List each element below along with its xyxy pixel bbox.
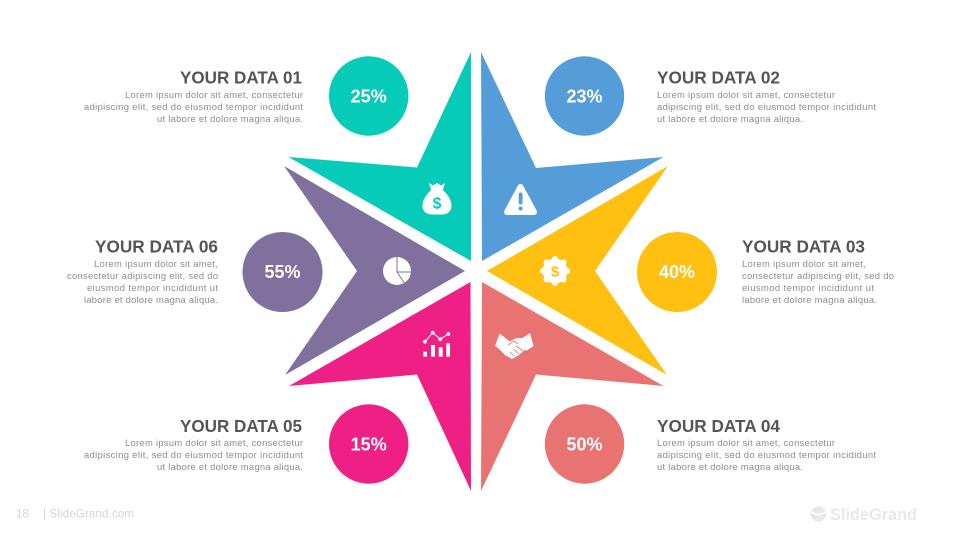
icon: money bag: $ [433,196,442,212]
icon: pie chart [383,256,412,285]
star point: purple [284,166,465,375]
panel: data 06 text: YOUR DATA 06 [95,236,218,256]
panel: data 05 text: adipiscing elit, sed do eiusmod tempor incididunt [84,449,303,460]
panel: data 02 text: Lorem ipsum dolor sit amet, consectetur [657,89,835,100]
panel: data 02 text: ut labore et dolore magna aliqua. [657,113,803,124]
icon: gear [540,256,570,286]
panel: data 01 text: YOUR DATA 01 [180,68,302,88]
panel: data 05 text: ut labore et dolore magna aliqua. [157,461,303,472]
star point: magenta [289,282,471,491]
badge: 40% [637,232,717,312]
panel: data 01 text: Lorem ipsum dolor sit amet, consectetur [125,89,303,100]
star point: yellow [487,166,668,375]
panel: data 04 text: ut labore et dolore magna aliqua. [657,461,803,472]
footer: brand logo: SlideGrand [830,505,917,524]
panel: data 03 text: eiusmod tempor incididunt ut [742,282,874,293]
panel: data 01 text: ut labore et dolore magna aliqua. [157,113,303,124]
panel: data 03 text [742,236,894,305]
badge: 50% [545,404,624,484]
star point: blue [481,52,664,261]
footer: site name: | SlideGrand.com [43,508,134,520]
icon: gear: $ [551,264,560,280]
icon: warning triangle [507,187,534,212]
badge: 25%: 25% [351,86,387,106]
panel: data 06 text: consectetur adipiscing elit, sed do [67,270,218,281]
panel: data 03 text: YOUR DATA 03 [742,236,865,256]
panel: data 01 text: adipiscing elit, sed do eiusmod tempor incididunt [84,101,303,112]
badge: 55%: 55% [264,262,301,282]
panel: data 04 text: adipiscing elit, sed do eiusmod tempor incididunt [657,449,876,460]
badge: 25% [329,56,408,136]
panel: data 03 text: consectetur adipiscing elit, sed do [742,270,894,281]
badge: 23%: 23% [566,86,603,106]
panel: data 04 text: Lorem ipsum dolor sit amet, consectetur [657,437,835,448]
panel: data 05 text [84,416,303,472]
badge: 55% [242,232,322,312]
badge: 23% [545,56,624,136]
panel: data 02 text: YOUR DATA 02 [657,68,780,88]
panel: data 06 text: eiusmod tempor incididunt ut [87,282,218,293]
panel: data 03 text: Lorem ipsum dolor sit amet, [742,258,866,269]
badge: 50%: 50% [566,434,603,454]
star point: teal [288,52,471,261]
star point: coral [481,282,664,491]
icon: line and bar chart [423,331,450,357]
badge: 15% [329,404,408,484]
panel: data 06 text: labore et dolore magna aliqua. [84,294,218,305]
panel: data 06 text: Lorem ipsum dolor sit amet, [94,258,218,269]
panel: data 06 text [67,236,218,305]
icon: money bag [422,183,452,214]
panel: data 02 text [657,68,876,124]
panel: data 01 text [84,68,303,124]
panel: data 02 text: adipiscing elit, sed do eiusmod tempor incididunt [657,101,876,112]
panel: data 05 text: YOUR DATA 05 [180,416,302,436]
footer: page number: 18 [16,508,29,520]
badge: 40%: 40% [659,262,695,282]
panel: data 03 text: labore et dolore magna aliqua. [742,294,877,305]
panel: data 05 text: Lorem ipsum dolor sit amet, consectetur [125,437,303,448]
badge: 15%: 15% [351,434,387,454]
panel: data 04 text: YOUR DATA 04 [657,416,780,436]
icon: handshake [495,333,534,359]
panel: data 04 text [657,416,876,472]
